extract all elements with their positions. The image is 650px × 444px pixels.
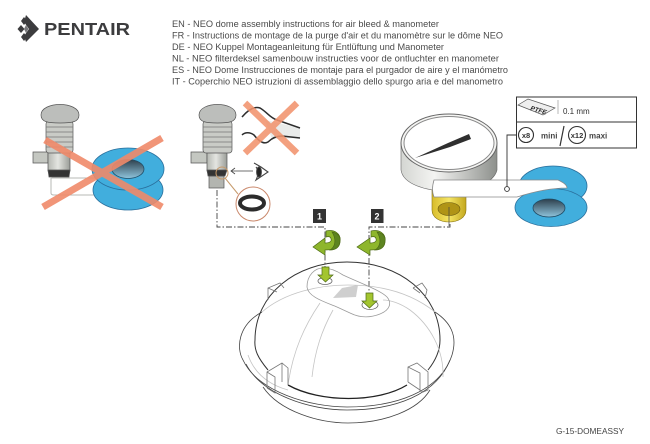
PTFE info box: [516, 97, 637, 148]
flange: [239, 312, 454, 407]
logo wordmark: PENTAIR: [44, 19, 130, 39]
title text block: six languages: ES - NEO Dome Instrucciones de montaje para el purgador de aire y el manómetro: [172, 65, 508, 76]
panel: manometer with PTFE tape: [401, 97, 637, 226]
step badges 1 and 2: [313, 209, 384, 223]
tape roll: [515, 166, 587, 226]
title text block: six languages: EN - NEO dome assembly instructions for air bleed & manometer: [172, 19, 440, 30]
icon: Pentair diamond mark: [18, 15, 39, 42]
tape roll: [92, 148, 164, 210]
forbidden spanner crossed out: [242, 103, 300, 153]
step 2: 2: [374, 212, 380, 222]
dash-dot connector lines: [217, 190, 450, 300]
bolt holes: [318, 278, 332, 284]
rotate arrow 1: [313, 231, 340, 255]
magnified o-ring callout: [216, 167, 270, 221]
step 1: 1: [317, 212, 322, 222]
title text block: six languages: DE - NEO Kuppel Montageanleitung für Entlüftung und Manometer: [172, 42, 445, 53]
centre logo: [333, 285, 358, 298]
panel: wrong assembly, tape on air bleed crossed out: [33, 104, 164, 210]
turns: x8 mini, x12 maxi: [518, 126, 607, 146]
brass fitting: [432, 190, 466, 226]
leader line: [505, 135, 516, 191]
dome shell: [255, 262, 440, 370]
manometer gauge: [401, 114, 497, 191]
red cross: [43, 138, 162, 207]
side clips: [267, 283, 428, 393]
dome: [239, 262, 454, 423]
panel: correct assembly valve with o-ring: [191, 103, 300, 221]
icon: PTFE strip: [518, 99, 555, 115]
logo: Pentair: [18, 15, 130, 42]
dome front rim: [288, 385, 407, 398]
PTFE info box: 0.1 mm: [563, 107, 590, 116]
arrow and eye icon: [231, 163, 268, 180]
down arrow 1: [318, 267, 333, 282]
faint ribs: [248, 285, 443, 390]
turns: x8 mini, x12 maxi: x12: [571, 131, 583, 140]
air bleed valve: [191, 104, 236, 188]
turns: x8 mini, x12 maxi: maxi: [589, 132, 607, 140]
down arrows on dome: [318, 267, 377, 308]
title text block: six languages: NL - NEO filterdeksel samenbouw instructies voor de ontluchter en manometer: [172, 54, 500, 64]
part number: G-15-DOMEASSY: [556, 427, 625, 436]
tape loop: [51, 177, 110, 195]
title text block: six languages: IT - Coperchio NEO istruzioni di assemblaggio dello spurgo aria e del manometro: [172, 76, 503, 88]
turns: x8 mini, x12 maxi: x8: [522, 131, 530, 140]
top plate: [307, 268, 390, 317]
tape strip: [432, 180, 567, 197]
PTFE info box: PTFE: [529, 105, 548, 117]
down arrow 2: [362, 293, 377, 308]
title text block: six languages: FR - Instructions de montage de la purge d'air et du manomètre sur le dôme NEO: [172, 30, 503, 42]
air bleed valve: [33, 104, 79, 177]
rotation arrows: [313, 231, 385, 255]
turns: x8 mini, x12 maxi: mini: [541, 132, 557, 140]
title text block: six languages: [172, 19, 508, 88]
rotate arrow 2: [357, 231, 385, 255]
